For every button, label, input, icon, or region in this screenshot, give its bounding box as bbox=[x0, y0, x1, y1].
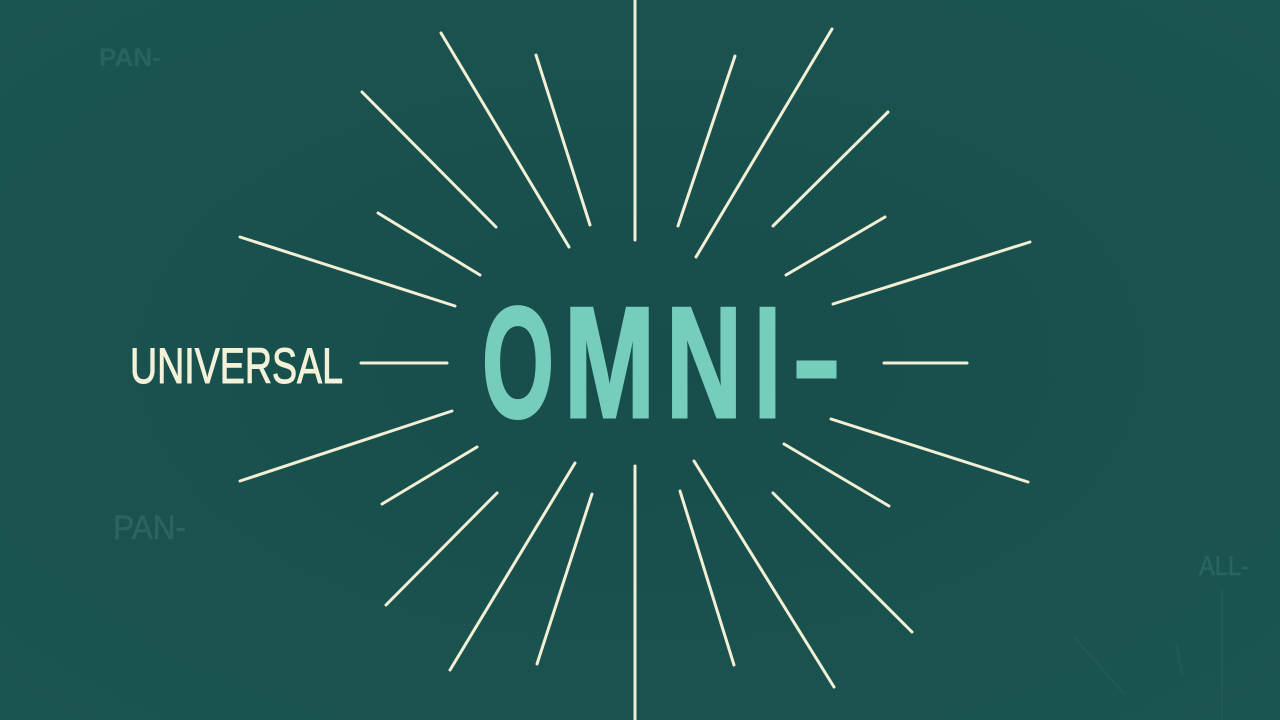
faint label: PAN- top left: PAN- bbox=[99, 44, 161, 72]
title: OMNI- bbox=[482, 275, 835, 451]
title: OMNI-: I bbox=[754, 275, 781, 451]
faint label: ALL- bottom right: ALL- bbox=[1199, 551, 1249, 581]
faint ghost rays bottom right bbox=[1074, 590, 1222, 720]
title: OMNI-: M bbox=[564, 275, 655, 451]
title: OMNI-: N bbox=[666, 275, 742, 451]
sunburst rays bbox=[240, 0, 1030, 720]
title: OMNI-: O bbox=[482, 275, 554, 451]
label: UNIVERSAL: UNIVERSAL bbox=[130, 338, 343, 394]
faint label: PAN- bottom left: PAN- bbox=[113, 509, 186, 547]
